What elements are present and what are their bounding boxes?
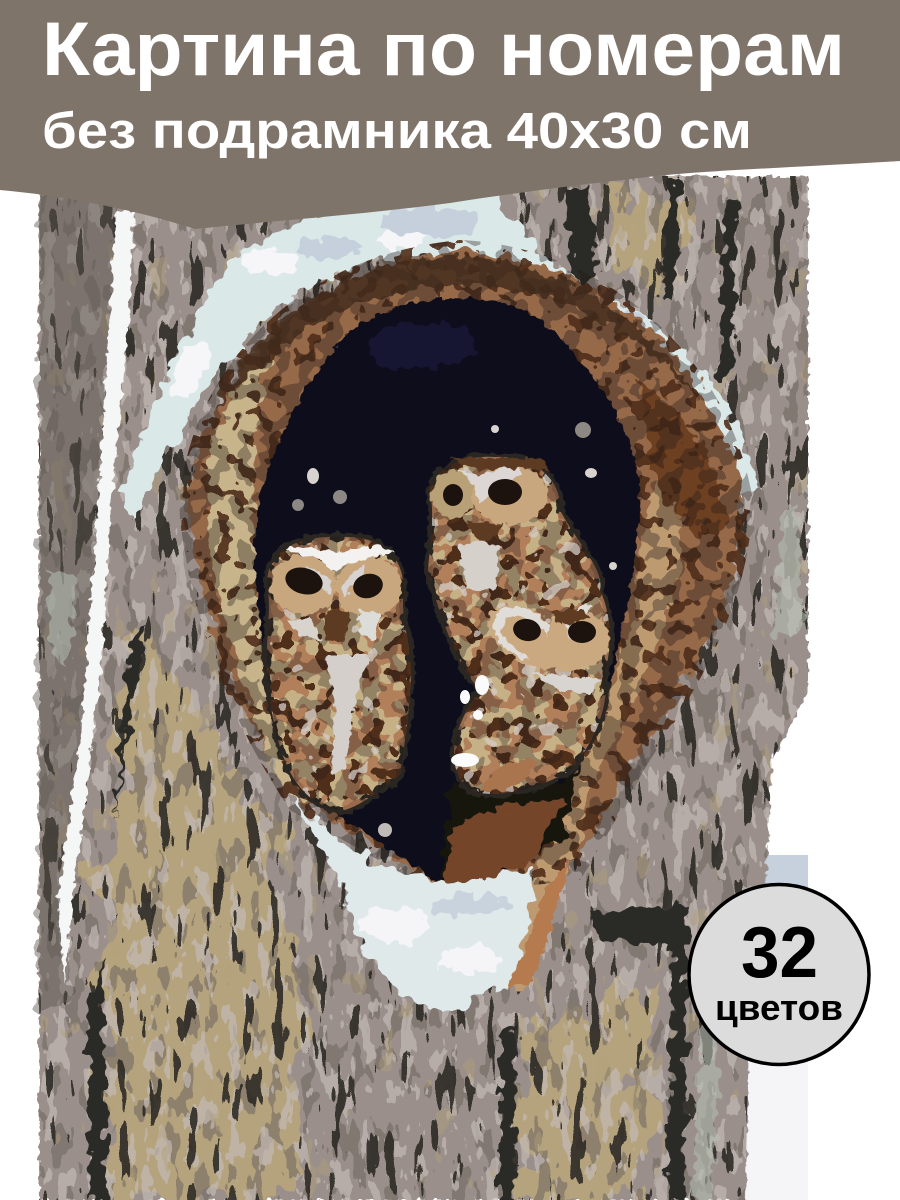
face discs upper owl [431,458,550,590]
badge label: цветов [715,987,843,1028]
face discs left owl [270,545,402,775]
colour count badge [689,884,869,1064]
bark textures [39,176,808,1200]
hollow brown rim [190,252,742,885]
snow shading [295,206,644,330]
eyes left owl [282,564,386,601]
tree trunk base [39,176,808,1200]
eyes upper owl [443,479,522,506]
black shadow lower hollow [440,770,580,878]
dusky purple shade in hollow [365,321,475,369]
dark hollow interior [255,298,640,881]
owls plumage texture [260,450,620,820]
eyes lower owl [511,616,596,644]
white snow line on left edge [58,212,134,985]
owl left [270,545,402,775]
badge number: 32 [741,913,818,993]
rim rust right side [640,380,728,536]
dark bark streaks [88,178,738,1200]
owl upper right [431,458,550,590]
rim tan left band [205,345,310,800]
left dark bark strip [39,190,118,1010]
brown chest lower owl [480,759,540,791]
rim dark upper edge [215,256,700,410]
subtitle: без подрамника 40х30 см [42,102,752,159]
painting: owls in a snowy tree hollow [39,176,808,1200]
header banner [0,0,900,229]
rust streak below hollow [508,860,570,985]
snow below the hollow [295,795,531,1012]
tan bark patches [101,200,690,1200]
rim textures [175,240,760,900]
rim tan right band [510,480,681,985]
white feather spots [451,675,489,767]
snow highlights [165,232,422,403]
rust lower hollow [445,800,565,878]
rust blob at the top of the hollow [500,359,560,399]
owls bodies [267,457,610,811]
snow arch over the hollow [122,192,758,520]
painting snow backdrop at right [740,680,808,1200]
snowflakes [292,422,617,837]
sage bark highlights [50,500,802,1200]
face discs lower owl [488,603,610,695]
title: Картина по номерам [42,7,845,92]
owl lower right [451,603,610,791]
